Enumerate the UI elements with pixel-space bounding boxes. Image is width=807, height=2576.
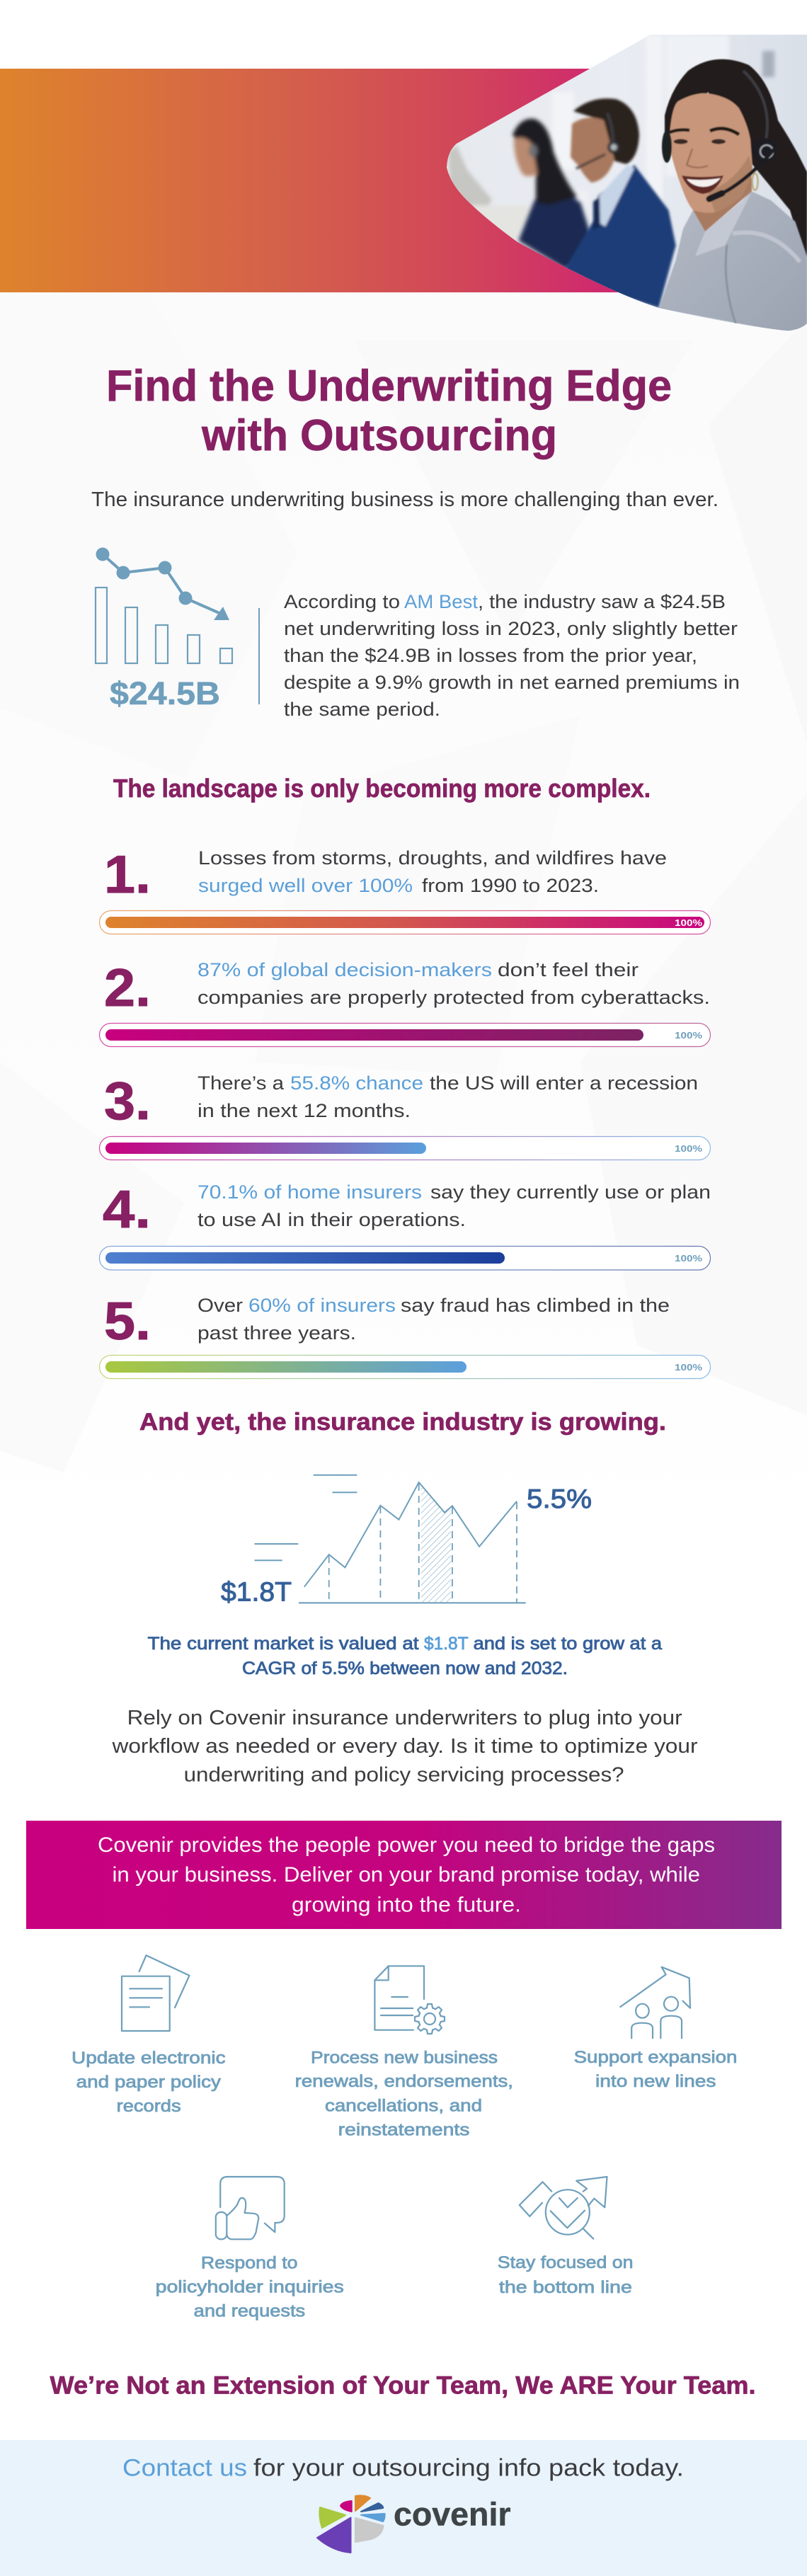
footer panel — [0, 2440, 807, 2576]
stat 4: 4. — [103, 1179, 151, 1239]
label — [295, 2048, 513, 2140]
title: with Outsourcing — [201, 411, 557, 460]
stat 4: to use AI in their operations. — [198, 1209, 466, 1230]
stat 2: don’t feel their — [498, 959, 639, 980]
chart caption: The current market is valued at — [147, 1634, 419, 1654]
main agent blouse — [659, 191, 807, 336]
line chart: market growth: 5.5% — [527, 1484, 592, 1514]
stat 3: 3. — [104, 1071, 151, 1130]
paragraph: rely on Covenir — [111, 1707, 698, 1787]
paragraph: rely on Covenir: underwriting and policy servicing processes? — [184, 1764, 624, 1787]
stat 2: 2. — [104, 958, 151, 1017]
title: Find the Underwriting Edge — [106, 362, 672, 411]
call to action: Contact us — [122, 2455, 247, 2482]
label: and requests — [194, 2301, 305, 2320]
callout banner — [26, 1821, 782, 1929]
stat 4: say they currently use or plan — [430, 1181, 711, 1203]
hero gradient banner — [0, 69, 623, 292]
label: Process new business — [311, 2048, 498, 2067]
stat 1: Losses from storms, droughts, and wildfires have — [198, 847, 667, 869]
stat 2: 87% of global decision-makers — [198, 959, 492, 980]
eyebrows — [670, 130, 689, 132]
icon: declining bar chart with $24.5B — [96, 548, 232, 711]
label — [498, 2253, 633, 2297]
mouth — [682, 176, 723, 194]
label: policyholder inquiries — [156, 2277, 344, 2296]
heading: landscape: The landscape is only becoming more complex. — [113, 774, 651, 803]
icon: magnifier with arrows — [520, 2177, 607, 2239]
progress bar 5 — [99, 1355, 711, 1379]
progress bar 3: 100% — [675, 1143, 703, 1154]
service 4: respond to policyholders — [156, 2177, 344, 2320]
label — [71, 2049, 226, 2116]
progress bar 2 — [99, 1024, 711, 1046]
label: Stay focused on — [498, 2253, 633, 2272]
hero photo: call center agents with headsets — [439, 32, 807, 336]
label: into new lines — [595, 2072, 716, 2091]
paragraph: AM Best statistic: According to — [284, 591, 400, 612]
progress bar 2: 100% — [675, 1030, 703, 1041]
line chart: market growth: $1.8T — [221, 1578, 292, 1608]
chart caption: $1.8T — [424, 1634, 469, 1654]
stat 3: the US will enter a recession — [430, 1072, 698, 1094]
label — [574, 2048, 737, 2091]
stat 1 — [99, 845, 711, 934]
heading: growing: And yet, the insurance industry is growing. — [139, 1409, 666, 1436]
stat 4: 70.1% of home insurers — [198, 1181, 422, 1203]
closing heading: We’re Not an Extension of Your Team, We ARE Your Team. — [50, 2372, 756, 2400]
label: reinstatements — [338, 2121, 469, 2140]
line chart: market growth — [221, 1475, 592, 1608]
stat 2: companies are properly protected from cyberattacks. — [198, 987, 710, 1008]
callout banner: Covenir provides the people power you need to bridge the gaps — [98, 1833, 715, 1857]
stat 5: past three years. — [198, 1322, 356, 1344]
label: cancellations, and — [325, 2097, 482, 2116]
label — [156, 2253, 344, 2320]
woman in background — [519, 184, 590, 269]
service 3: support expansion — [574, 1967, 737, 2091]
monitor — [448, 145, 492, 205]
stat 2 — [99, 958, 711, 1046]
label: the bottom line — [499, 2278, 632, 2297]
progress bar 1: 100% — [675, 917, 703, 928]
icon: thumbs up speech bubble — [216, 2177, 285, 2239]
stat 1: surged well over 100% — [198, 875, 413, 896]
service 2: process new business — [295, 1966, 513, 2140]
stat 5: 60% of insurers — [248, 1295, 396, 1316]
icon: documents — [122, 1955, 190, 2031]
call to action: for your outsourcing info pack today. — [253, 2455, 684, 2482]
stat 3: There’s a — [198, 1072, 285, 1094]
paragraph: AM Best statistic: than the $24.9B in losses from the prior year, — [284, 645, 697, 666]
main agent hair — [665, 59, 807, 258]
stat 3 — [99, 1071, 711, 1160]
progress bar 5: 100% — [675, 1362, 703, 1373]
service 5: bottom line — [498, 2177, 633, 2297]
paragraph: AM Best statistic: net underwriting loss in 2023, only slightly better — [284, 618, 738, 639]
paragraph: AM Best statistic: despite a 9.9% growth in net earned premiums in — [284, 672, 740, 693]
label: Support expansion — [574, 2048, 737, 2067]
headset — [662, 130, 672, 163]
stat 1: from 1990 to 2023. — [422, 875, 599, 896]
Covenir logo — [317, 2495, 511, 2553]
label: Update electronic — [71, 2049, 226, 2068]
label: records — [117, 2097, 181, 2116]
stat 5 — [99, 1291, 711, 1379]
nose — [687, 149, 708, 168]
callout banner: growing into the future. — [292, 1894, 521, 1917]
stat 5: Over — [198, 1295, 243, 1316]
call to action — [122, 2455, 684, 2482]
paragraph: AM Best statistic — [284, 591, 740, 720]
main agent neck — [692, 175, 752, 232]
progress bar 1 — [99, 910, 711, 934]
service 1: update records — [71, 1955, 226, 2116]
paragraph: AM Best statistic: the same period. — [284, 699, 440, 720]
stat 5: say fraud has climbed in the — [401, 1295, 670, 1316]
chart caption: and is set to grow at a — [474, 1634, 662, 1654]
icon: declining bar chart with $24.5B: $24.5B — [110, 675, 220, 711]
icon: document with gear — [374, 1966, 445, 2034]
stat 3: 55.8% chance — [290, 1072, 423, 1094]
chart caption — [147, 1634, 662, 1678]
label: and paper policy — [76, 2073, 222, 2092]
callout banner: in your business. Deliver on your brand promise today, while — [112, 1863, 700, 1887]
stat 3: in the next 12 months. — [198, 1100, 411, 1121]
paragraph: AM Best statistic: AM Best — [404, 591, 479, 612]
chart caption: CAGR of 5.5% between now and 2032. — [242, 1659, 568, 1678]
icon: house arrow with two people — [620, 1967, 690, 2038]
label: renewals, endorsements, — [295, 2072, 513, 2091]
progress bar 4: 100% — [675, 1253, 703, 1264]
main agent face — [670, 93, 752, 213]
paragraph: rely on Covenir: Rely on Covenir insurance underwriters to plug into your — [127, 1707, 682, 1729]
progress bar 3 — [99, 1137, 711, 1160]
man in background — [565, 165, 676, 308]
progress bar 4 — [99, 1246, 711, 1270]
stat 5: 5. — [104, 1291, 151, 1351]
Covenir logo: covenir — [394, 2496, 511, 2533]
stat 4 — [99, 1179, 711, 1270]
paragraph: AM Best statistic: , the industry saw a $24.5B — [478, 591, 726, 612]
paragraph: rely on Covenir: workflow as needed or every day. Is it time to optimize your — [111, 1735, 698, 1758]
title — [106, 362, 672, 460]
intro line: The insurance underwriting business is more challenging than ever. — [91, 488, 719, 511]
label: Respond to — [201, 2253, 297, 2272]
eyes — [674, 139, 688, 144]
stat 1: 1. — [104, 845, 151, 904]
